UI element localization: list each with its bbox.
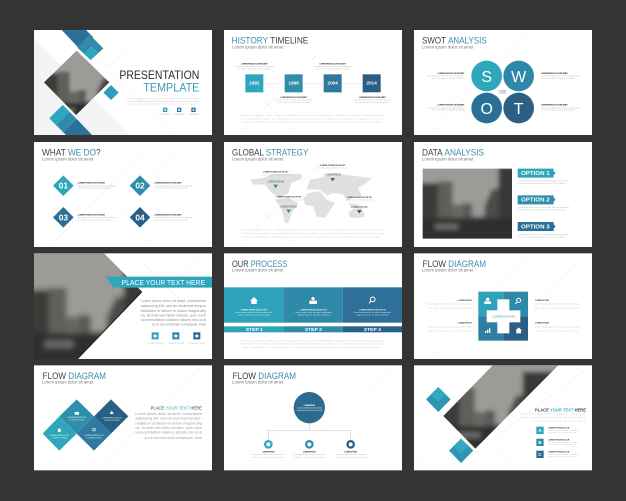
item 03: Lorem ipsum dolor sit amet consectetur adipiscing xyxy=(78,216,116,219)
body text: magna aliqua ut enim ad minim veniam xyxy=(534,419,586,422)
heading: HISTORY TIMELINE xyxy=(232,36,308,46)
timeline labels: LOREM IPSUM DOLOR SIT AMET xyxy=(359,96,386,99)
photo edge shadow xyxy=(77,292,142,359)
panel: global strategy xyxy=(224,142,402,247)
timeline labels: LOREM IPSUM DOLOR SIT AMET xyxy=(319,62,347,65)
icon row: LOREM IPSUM xyxy=(174,114,185,116)
node 3: LOREM IPSUM xyxy=(344,451,357,453)
panel: history timeline: Lorem ipsum dolor sit amet xyxy=(232,44,284,49)
node 1: sed quis nostrud exercitation xyxy=(252,456,284,459)
right labels: elit sed do eiusmod tempor incididunt xyxy=(541,77,575,80)
diamond cluster: LOREM IPSUM xyxy=(104,420,120,422)
year 2004 xyxy=(324,74,342,92)
option 2: Lorem ipsum dolor sit amet, consectetur adipiscing elit sed do xyxy=(518,206,570,209)
node 1: Lorem ipsum dolor sit amet, consectetur xyxy=(252,453,285,456)
option 2: eiusmod tempor incididunt ut labore et dolore magna xyxy=(518,209,567,212)
right labels: LOREM IPSUM DOLOR SIT AMET xyxy=(541,104,568,107)
year 1998: 1998 xyxy=(288,81,299,86)
item 02: Lorem ipsum dolor sit amet consectetur adipiscing xyxy=(154,184,192,187)
map markers: LOREM IPSUM DOLOR SIT xyxy=(347,197,373,199)
right labels: Lorem ipsum dolor sit amet, consectetur adipis xyxy=(535,303,579,306)
step 1 column xyxy=(224,287,283,323)
left labels: LOREM IPSUM DOLOR SIT AMET xyxy=(438,72,465,75)
right labels: Lorem ipsum dolor sit amet consectetur adipiscing xyxy=(541,106,579,109)
option 2 xyxy=(518,195,570,212)
diamond cluster: LOREM IPSUM xyxy=(52,437,67,439)
photo band xyxy=(444,366,558,448)
panel: place your text here xyxy=(34,253,212,360)
item 04: elit sed do eiusmod tempor incididunt xyxy=(154,218,188,221)
centre label: IPSUM xyxy=(500,93,506,95)
timeline labels: elit sed do eiusmod tempor incididunt xyxy=(238,67,271,70)
option 3 xyxy=(518,222,570,239)
cover body text: quis nostrud exercitation ullamco laboris nisi ut aliquip ex xyxy=(131,103,199,106)
left labels: sed, quis nostrud exercitation ullamco xyxy=(428,329,473,332)
panel: flow diagram hierarchy xyxy=(224,365,402,470)
swot circles: S xyxy=(481,69,492,86)
right labels: Lorem ipsum dolor sit amet consectetur adipiscing xyxy=(541,75,579,78)
heading: FLOW DIAGRAM xyxy=(233,371,296,381)
item 01: 01 xyxy=(59,181,68,191)
item 03: elit sed do eiusmod tempor incididunt xyxy=(78,218,111,221)
photo xyxy=(34,254,142,359)
item 04 xyxy=(130,207,192,228)
panel: data analysis: Lorem ipsum dolor sit amet xyxy=(422,156,474,161)
body text: Lorem ipsum dolor sit amet, consectetur adipiscing elit, sed do eiusmod tempor incididunt ut labore et dolore magna aliqua xyxy=(241,229,386,232)
body text: ip ex ea commodo consequat. Duis xyxy=(145,436,202,440)
node 1: LOREM IPSUM xyxy=(262,451,275,453)
diamond cluster: LOREM IPSUM DOLOR xyxy=(50,435,70,437)
year 1998 xyxy=(285,74,303,92)
body text xyxy=(241,339,386,349)
body text: Lorem ipsum dolor sit amet, consectetur xyxy=(141,299,206,303)
item 02: 02 xyxy=(135,181,145,191)
step 3 column: Lorem ipsum dolor sit amet consectetur xyxy=(354,311,391,314)
left labels: Lorem ipsum dolor sit amet consectetur adipiscing xyxy=(426,106,464,109)
step 3 column: adipiscing elit sed do eiusmod xyxy=(356,313,388,316)
cover body text: Lorem ipsum dolor sit amet, consectetur adipiscing elit sed do eiusmod xyxy=(127,97,199,100)
map markers: LOREM IPSUM DOLOR SIT xyxy=(320,165,346,167)
left labels: elit sed do eiusmod tempor incididunt xyxy=(431,77,465,80)
body text: ud exercitation ullamco laboris nisi ut al xyxy=(135,431,202,435)
timeline labels xyxy=(235,62,391,104)
panel: what we do xyxy=(34,142,212,247)
item 02 xyxy=(130,175,192,196)
option 1 xyxy=(518,169,570,185)
body text: ncididunt ut labore et dolore magna aliq xyxy=(135,421,202,425)
diamond cluster: LOREM IPSUM xyxy=(69,419,85,421)
diamond bottom xyxy=(449,439,473,463)
right labels: Lorem ipsum dolor sit amet, consectetur adipis xyxy=(535,325,579,328)
panel: what we do: Lorem ipsum dolor sit amet xyxy=(42,156,94,161)
year 2004: 2004 xyxy=(327,81,338,86)
item B: consectetur adipiscing xyxy=(548,443,576,446)
icon row: LOREM IPSUM xyxy=(188,114,199,116)
main circle: adipiscing elit sed do eiusmod xyxy=(297,409,322,412)
diamond top xyxy=(426,387,451,412)
map markers: LOREM IPSUM xyxy=(281,207,297,209)
option 1: OPTION 1 xyxy=(521,171,550,177)
panel: flow diagram diamonds xyxy=(34,365,212,470)
ribbon text: PLACE YOUR TEXT HERE xyxy=(122,278,205,287)
step 1 column: LOREM IPSUM DOLOR SIT xyxy=(241,309,268,311)
body text: sed do eiusmod tempor incididunt ut labore et dolore xyxy=(521,416,587,419)
option 1: Lorem ipsum dolor sit amet, consectetur adipiscing elit sed do xyxy=(518,179,570,182)
body text: ua. Ut enim ad minim veniam, quis nostr xyxy=(135,426,202,430)
step 1 column: adipiscing elit sed do eiusmod xyxy=(238,313,270,316)
item A: Lorem ipsum dolor sit amet xyxy=(548,429,578,432)
item 02: LOREM IPSUM DOLOR SIT AMET xyxy=(154,182,182,185)
heading: FLOW DIAGRAM xyxy=(43,371,106,381)
node 3: sed quis nostrud exercitation xyxy=(335,456,367,459)
photo diamond xyxy=(44,50,110,115)
item B: B xyxy=(538,440,542,445)
cross block xyxy=(478,292,528,341)
panel: data analysis xyxy=(414,142,592,247)
icon row xyxy=(147,332,205,345)
left labels: LOREM IPSUM DOLOR SIT AMET xyxy=(438,104,465,107)
left labels: LOREM IPSUM xyxy=(458,323,472,325)
step 2 column: Lorem ipsum dolor sit amet consectetur xyxy=(295,311,332,314)
body text: Lorem ipsum dolor sit amet, consectetur adipiscing elit xyxy=(521,413,586,416)
right labels xyxy=(535,300,580,332)
panel: our process: Lorem ipsum dolor sit amet xyxy=(232,268,284,273)
item 01: Lorem ipsum dolor sit amet consectetur adipiscing xyxy=(78,184,116,187)
main circle xyxy=(294,392,325,423)
diamond cluster: LOREM IPSUM DOLOR xyxy=(84,435,104,437)
map markers: Lorem ipsum dolor sit amet xyxy=(274,198,303,201)
body text xyxy=(135,412,202,440)
heading: FLOW DIAGRAM xyxy=(423,259,486,269)
cover body text: tempor incididunt ut labore et dolore magna aliqua ut enim ad minim veniam xyxy=(127,100,200,103)
right labels: LOREM IPSUM xyxy=(535,300,549,302)
swot circles: O xyxy=(480,101,493,118)
icon row: LOREM IPSUM xyxy=(168,343,184,345)
map markers: Lorem ipsum dolor sit amet xyxy=(318,167,347,170)
main circle: LOREM IPSUM xyxy=(304,405,315,407)
body text xyxy=(241,114,386,124)
connectors xyxy=(268,423,351,440)
panel: global strategy: Lorem ipsum dolor sit amet xyxy=(232,156,284,161)
left labels: Lorem ipsum dolor sit amet consectetur adipiscing xyxy=(426,75,464,78)
centre label: LOREM xyxy=(499,90,507,92)
item B: LOREM IPSUM DOLOR xyxy=(548,440,570,442)
item B xyxy=(536,439,578,446)
item C xyxy=(536,451,578,458)
item C: LOREM IPSUM DOLOR xyxy=(548,452,570,454)
icon row: LOREM IPSUM xyxy=(160,114,171,116)
year 2014: 2014 xyxy=(366,81,377,86)
map markers: LOREM IPSUM DOLOR SIT xyxy=(276,197,302,199)
timeline labels: elit sed do eiusmod tempor incididunt xyxy=(316,67,350,70)
step 1 column: Lorem ipsum dolor sit amet consectetur xyxy=(235,311,273,314)
item 01: LOREM IPSUM DOLOR SIT AMET xyxy=(78,182,106,185)
body text: ip ex ea commodo consequat. Duis xyxy=(152,323,206,327)
right labels: LOREM IPSUM xyxy=(535,323,549,325)
item 03: 03 xyxy=(59,212,68,222)
panel: flow diagram cross: Lorem ipsum dolor sit amet xyxy=(422,268,474,273)
item C: Lorem ipsum dolor sit amet xyxy=(548,453,578,456)
body text xyxy=(141,299,206,327)
cross block: LOREM IPSUM xyxy=(492,314,515,318)
diamond cluster xyxy=(43,399,128,451)
node 2 xyxy=(293,440,326,459)
timeline labels: elit sed do eiusmod tempor incididunt xyxy=(277,101,311,104)
option 3: eiusmod tempor incididunt ut labore et dolore magna xyxy=(518,236,567,239)
photo xyxy=(422,168,512,239)
right labels xyxy=(541,72,579,112)
body text xyxy=(521,413,587,422)
left labels: Lorem ipsum dolor sit amet, consectetur adipis xyxy=(428,325,472,328)
item A xyxy=(536,427,578,434)
centre label xyxy=(499,90,507,95)
step 2 column xyxy=(283,287,343,323)
icon row: LOREM IPSUM xyxy=(189,343,205,345)
left labels: Lorem ipsum dolor sit amet, consectetur adipis xyxy=(428,303,472,306)
swot circles: T xyxy=(514,101,524,118)
timeline labels: Lorem ipsum dolor sit amet consectetur adipiscing xyxy=(353,99,391,102)
right labels: sed, quis nostrud exercitation ullamco xyxy=(535,329,580,332)
diamond cluster: LOREM IPSUM xyxy=(86,437,102,439)
node 2: Lorem ipsum dolor sit amet, consectetur xyxy=(293,453,326,456)
item 01: elit sed do eiusmod tempor incididunt xyxy=(78,187,111,190)
left labels xyxy=(428,300,473,332)
map markers: LOREM IPSUM xyxy=(268,181,284,183)
panel: our process xyxy=(224,253,402,359)
map markers: Lorem ipsum dolor sit amet xyxy=(345,199,374,202)
body text: dolor in reprehenderit in voluptate velit esse cillum dolore eu fugiat nulla pariatur excepteur sint occaecat cupidatat xyxy=(243,346,380,349)
panel: history timeline xyxy=(224,30,402,135)
item C: C xyxy=(538,452,542,457)
body text: Lorem ipsum dolor sit amet, consectetur adipiscing elit, sed do eiusmod tempor incididunt ut labore et dolore magna aliqua xyxy=(241,339,386,342)
item 04: 04 xyxy=(135,212,145,222)
icon row: LOREM IPSUM xyxy=(147,343,163,345)
node 3: Lorem ipsum dolor sit amet, consectetur xyxy=(335,453,367,456)
heading: DATA ANALYSIS xyxy=(422,148,484,158)
right labels: LOREM IPSUM DOLOR SIT AMET xyxy=(541,72,568,75)
body text: Lorem ipsum dolor sit amet, consectetur adipiscing elit, sed do eiusmod tempor incididunt ut labore et dolore magna aliqua xyxy=(241,114,386,117)
option 3: OPTION 3 xyxy=(521,225,550,231)
diamond cluster: LOREM IPSUM DOLOR xyxy=(102,418,122,420)
panel: presentation template cover xyxy=(34,30,212,136)
timeline labels: Lorem ipsum dolor sit amet consectetur adipiscing xyxy=(314,65,352,68)
diamond cluster: LOREM IPSUM DOLOR xyxy=(67,417,87,419)
body text: Lorem ipsum dolor sit amet, consectetur xyxy=(135,412,202,416)
map markers: LOREM IPSUM xyxy=(325,175,341,177)
item A: LOREM IPSUM DOLOR xyxy=(548,428,570,430)
cover body text xyxy=(127,97,200,106)
body text xyxy=(241,229,386,238)
body text: adipiscing elit, sed do eiusmod tempor xyxy=(141,304,206,308)
body text: Ut enim ad minim veniam, quis nostrud exercitation ullamco laboris nisi ut aliquip ex ea commodo consequat duis aute irure xyxy=(242,343,385,346)
left labels: LOREM IPSUM xyxy=(458,300,472,302)
timeline labels: Lorem ipsum dolor sit amet consectetur adipiscing xyxy=(235,65,273,68)
panel: swot analysis xyxy=(414,30,592,135)
heading: SWOT ANALYSIS xyxy=(422,36,487,46)
ribbon xyxy=(106,277,212,288)
map markers: Lorem ipsum dolor sit amet xyxy=(261,173,290,176)
item C: consectetur adipiscing xyxy=(548,455,576,458)
item B: Lorem ipsum dolor sit amet xyxy=(548,441,578,444)
map markers xyxy=(261,165,374,214)
map markers: LOREM IPSUM DOLOR SIT xyxy=(263,172,289,174)
step labels: STEP 3 xyxy=(364,327,381,333)
step 3 column xyxy=(343,287,402,323)
panel: flow diagram hierarchy: Lorem ipsum dolor sit amet xyxy=(232,380,284,385)
item A: A xyxy=(538,428,542,433)
option 2: OPTION 2 xyxy=(521,198,550,204)
swot circles xyxy=(471,61,534,123)
right labels: elit sed do eiusmod tempor incididunt xyxy=(541,109,575,112)
step labels: STEP 2 xyxy=(305,327,322,333)
node 2: sed quis nostrud exercitation xyxy=(293,456,325,459)
left labels: elit sed do eiusmod tempor incididunt xyxy=(431,109,465,112)
icon row xyxy=(160,108,199,116)
panel: place your text abc xyxy=(414,365,592,470)
year 1992 xyxy=(245,74,263,92)
timeline labels: elit sed do eiusmod tempor incididunt xyxy=(356,101,389,104)
item 03: LOREM IPSUM DOLOR SIT AMET xyxy=(78,213,106,216)
heading: WHAT WE DO? xyxy=(42,148,101,158)
left labels xyxy=(426,72,465,112)
subheading: PLACE YOUR TEXT HERE xyxy=(151,405,202,410)
body text: adipiscing elit, sed do eiusmod tempor i xyxy=(135,417,202,421)
body text: Ut enim ad minim veniam, quis nostrud exercitation ullamco laboris nisi ut aliquip ex ea commodo consequat duis aute irure xyxy=(242,232,385,235)
timeline labels: LOREM IPSUM DOLOR SIT AMET xyxy=(280,96,308,99)
main circle: Lorem ipsum dolor sit amet consectetur xyxy=(297,407,322,410)
node 1 xyxy=(252,440,285,459)
heading: GLOBAL STRATEGY xyxy=(232,148,309,158)
item 03 xyxy=(53,207,116,228)
panel: flow diagram cross xyxy=(414,253,592,359)
item 02: elit sed do eiusmod tempor incididunt xyxy=(154,187,188,190)
swot circles: W xyxy=(511,69,527,86)
option 1: eiusmod tempor incididunt ut labore et dolore magna xyxy=(518,182,567,185)
node 3 xyxy=(335,440,367,459)
body text: dolor in reprehenderit in voluptate velit esse cillum dolore eu fugiat nulla pariatur excepteur sint occaecat cupidatat xyxy=(243,235,380,238)
world map xyxy=(250,173,372,223)
item 04: LOREM IPSUM DOLOR SIT AMET xyxy=(154,213,182,216)
item 01 xyxy=(53,175,116,196)
step labels: STEP 1 xyxy=(246,327,263,333)
map markers: LOREM IPSUM xyxy=(351,207,368,209)
step 2 column: adipiscing elit sed do eiusmod xyxy=(297,313,329,316)
panel: flow diagram diamonds: Lorem ipsum dolor sit amet xyxy=(42,380,94,385)
panel: swot analysis: Lorem ipsum dolor sit amet xyxy=(422,44,474,49)
step labels xyxy=(224,326,402,333)
node 2: LOREM IPSUM xyxy=(303,451,316,453)
body text: incididunt ut labore et dolore magna aliq xyxy=(141,309,206,313)
item 04: Lorem ipsum dolor sit amet consectetur adipiscing xyxy=(154,216,192,219)
timeline labels: Lorem ipsum dolor sit amet consectetur adipiscing xyxy=(275,99,313,102)
item A: consectetur adipiscing xyxy=(548,431,576,434)
right labels: sed, quis nostrud exercitation ullamco xyxy=(535,307,580,310)
step 2 column: LOREM IPSUM DOLOR SIT xyxy=(300,309,327,311)
title: PRESENTATION xyxy=(119,68,199,82)
body text: Ut enim ad minim veniam, quis nostrud exercitation ullamco laboris nisi ut aliquip ex ea commodo consequat duis aute irure xyxy=(242,117,385,120)
year 1992: 1992 xyxy=(249,81,260,86)
body text: dolor in reprehenderit in voluptate velit esse cillum dolore eu fugiat nulla pariatur excepteur sint occaecat cupidatat xyxy=(243,121,380,124)
subheading: PLACE YOUR TEXT HERE xyxy=(535,407,586,412)
option 3: Lorem ipsum dolor sit amet, consectetur adipiscing elit sed do xyxy=(518,233,570,236)
body text: ud exercitation ullamco laboris nisi ut al xyxy=(141,318,206,322)
year 2014 xyxy=(363,74,381,92)
subtitle: TEMPLATE xyxy=(143,81,199,95)
left labels: sed, quis nostrud exercitation ullamco xyxy=(428,307,473,310)
heading: OUR PROCESS xyxy=(232,259,287,269)
timeline labels: LOREM IPSUM DOLOR SIT AMET xyxy=(241,62,268,65)
timeline connector xyxy=(263,82,363,84)
step 3 column: LOREM IPSUM DOLOR SIT xyxy=(359,309,386,311)
body text: ua. Ut enim ad minim veniam, quis nostr xyxy=(141,313,206,317)
